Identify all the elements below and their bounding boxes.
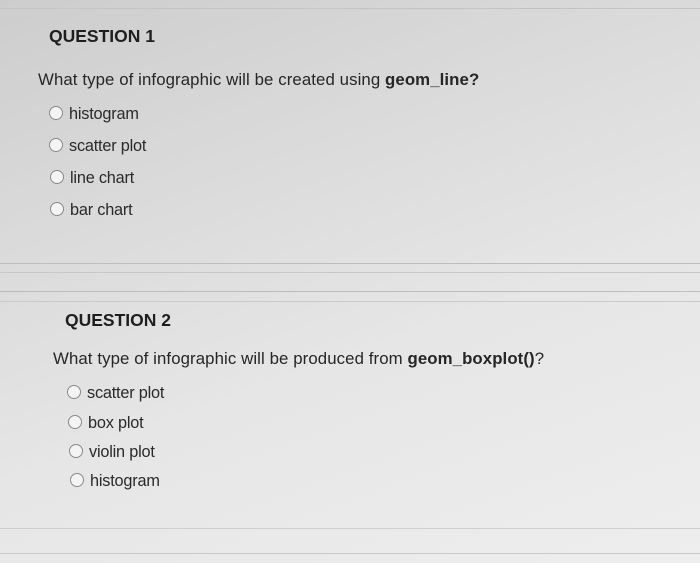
- option: bar chart: bar chart: [70, 201, 132, 219]
- option: violin plot: violin plot: [89, 443, 155, 461]
- option: histogram: histogram: [69, 105, 139, 123]
- option: histogram: histogram: [90, 472, 160, 490]
- panel: question 1: [38, 26, 479, 219]
- question text 2: What type of infographic will be produced from geom_boxplot()?: [53, 349, 544, 368]
- heading: question 2: QUESTION 2: [65, 310, 171, 330]
- option: box plot: box plot: [88, 414, 143, 432]
- option: scatter plot: scatter plot: [87, 384, 164, 402]
- question text 1: What type of infographic will be created using geom_line?: [38, 70, 479, 89]
- option: scatter plot: scatter plot: [69, 137, 146, 155]
- heading: question 1: QUESTION 1: [49, 26, 155, 46]
- option: line chart: line chart: [70, 169, 134, 187]
- panel: question 2: [53, 310, 544, 490]
